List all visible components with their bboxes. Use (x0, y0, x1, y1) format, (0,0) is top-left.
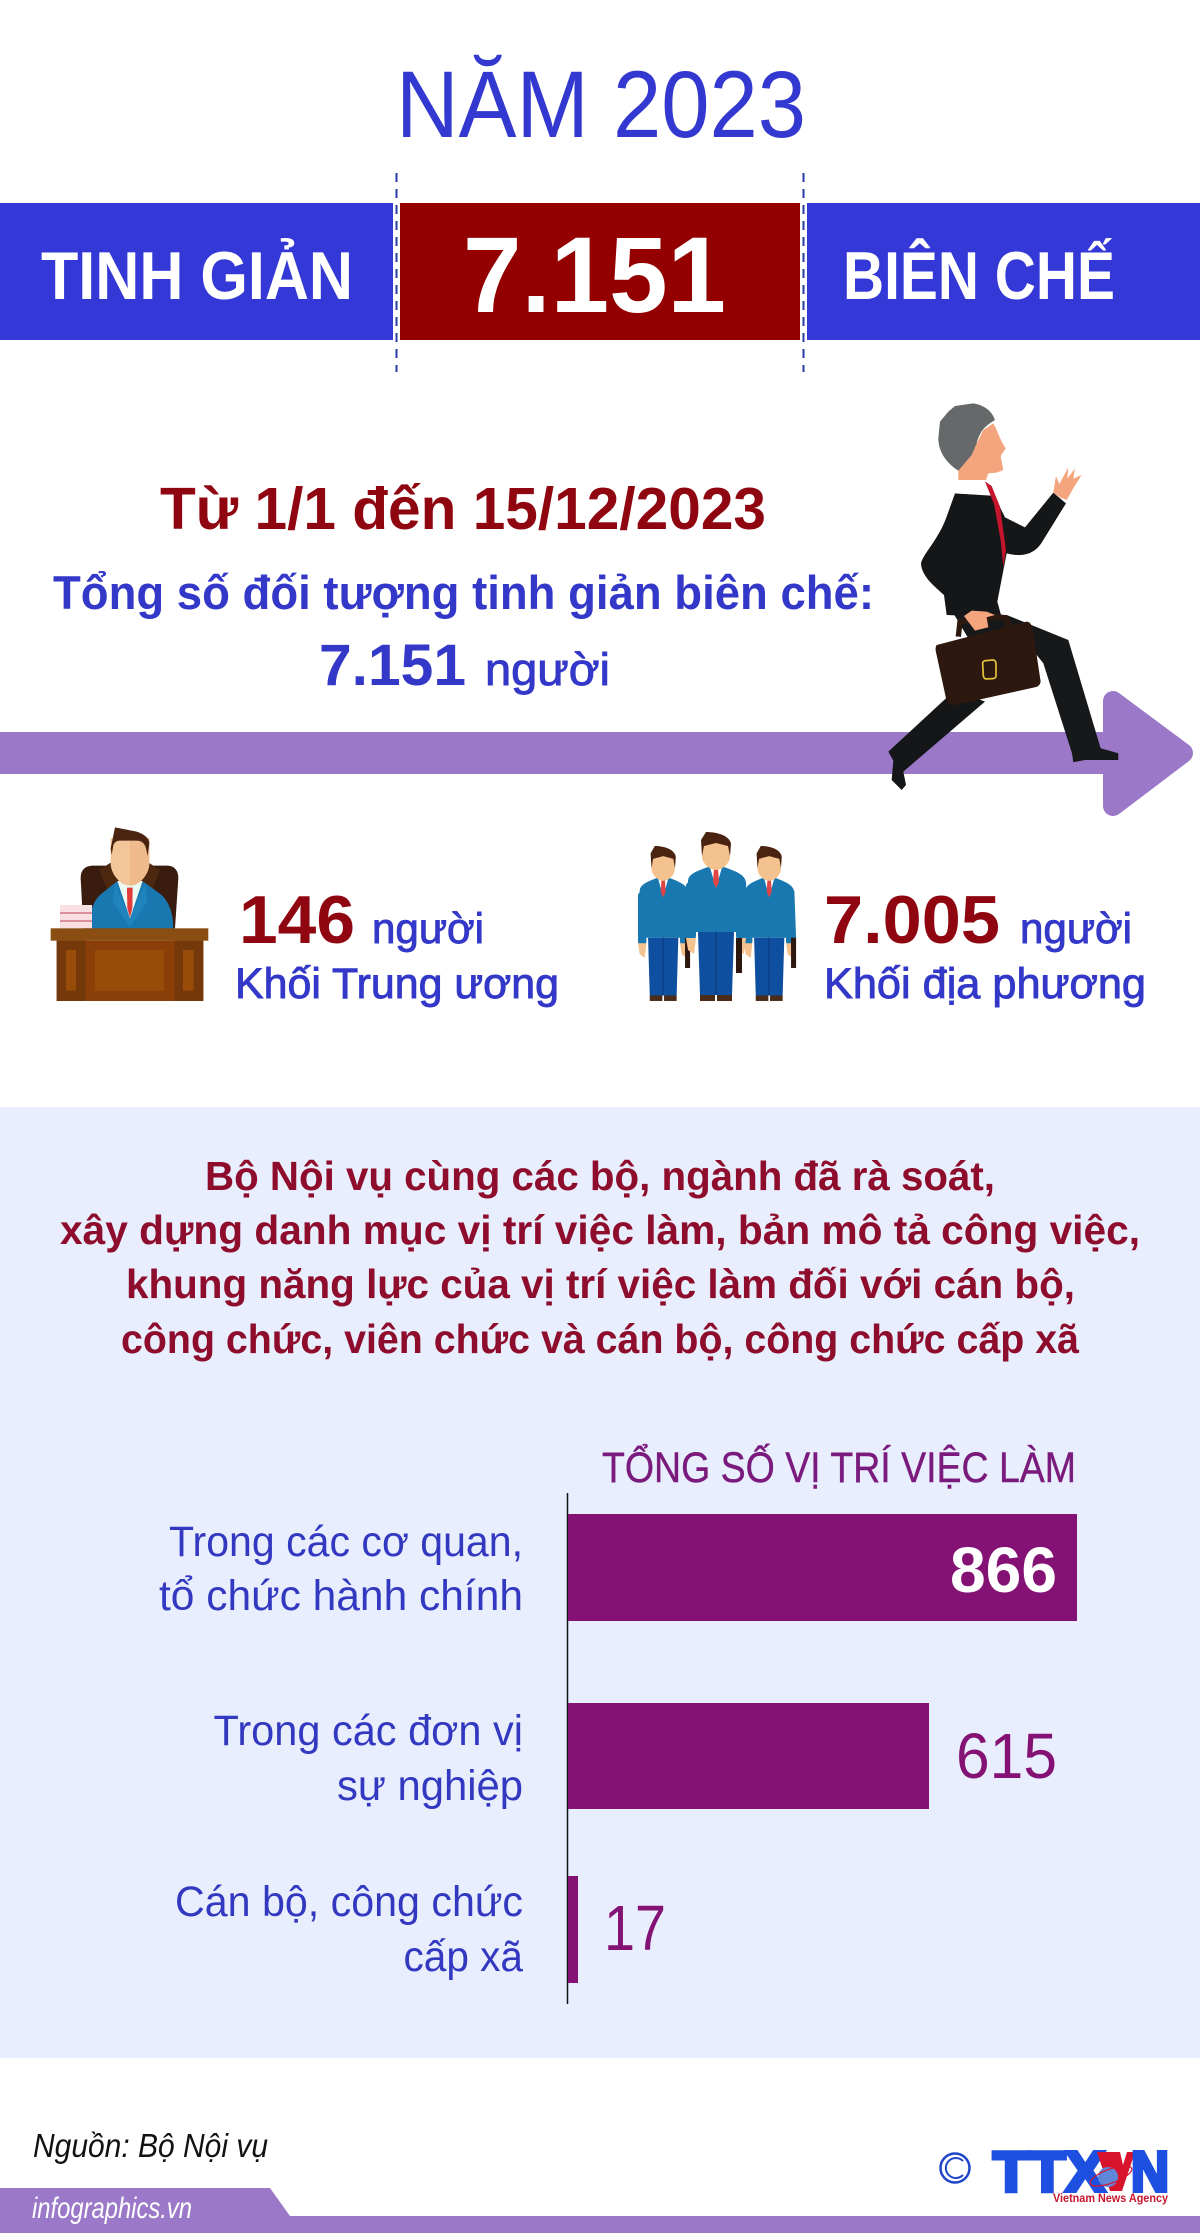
label: administrative agencies (159, 1518, 523, 1620)
chair wings (99, 863, 160, 892)
total number: 7.151 (319, 633, 466, 698)
stat: central bloc (235, 882, 559, 1008)
logo: TTXVN: TTX (993, 2140, 1105, 2204)
label: administrative agencies: tổ chức hành chính (159, 1572, 523, 1620)
banner: tinh giản 7.151 biên chế (0, 173, 1200, 372)
hair (111, 827, 149, 856)
chart heading: TỔNG SỐ VỊ TRÍ VIỆC LÀM (602, 1442, 1076, 1492)
face (958, 423, 1006, 480)
axis (566, 1493, 568, 2004)
stat: central bloc: 146 (239, 882, 355, 958)
total subject text: Tổng số đối tượng tinh giản biên chế: (53, 566, 874, 619)
panel: job positions (0, 1107, 1200, 2058)
left figure (638, 846, 690, 1001)
logo: TTXVN: Vietnam News Agency (1053, 2193, 1169, 2205)
total number: người (485, 644, 610, 695)
jacket (90, 882, 173, 928)
panel paragraph: công chức, viên chức và cán bộ, công chức cấp xã (121, 1316, 1079, 1362)
stat: local bloc: 7.005 (824, 882, 1000, 958)
desk panel (95, 950, 164, 991)
briefcase (936, 622, 1041, 705)
shirt (117, 881, 143, 918)
footer band (0, 2188, 1200, 2233)
desk body (57, 941, 203, 1001)
icon: three local officials (638, 832, 796, 1001)
lapels (113, 883, 147, 927)
face (111, 838, 149, 886)
desk inset right (183, 950, 194, 991)
bar chart: total job positions (159, 1442, 1077, 2004)
footer site: infographics.vn (32, 2192, 192, 2225)
label: commune officials: Cán bộ, công chức (175, 1878, 523, 1926)
books (60, 905, 92, 928)
panel paragraph: Bộ Nội vụ cùng các bộ, ngành đã rà soát, (205, 1153, 995, 1199)
label: public service units: sự nghiệp (337, 1762, 523, 1810)
value 17: 17 (604, 1892, 666, 1964)
date heading: Từ 1/1 đến 15/12/2023 (160, 476, 766, 542)
stat: local bloc: người (1020, 905, 1132, 953)
panel paragraph: khung năng lực của vị trí việc làm đối với cán bộ, (126, 1261, 1075, 1307)
hair (938, 403, 995, 471)
panel paragraph: xây dựng danh mục vị trí việc làm, bản mô tả công việc, (60, 1207, 1140, 1253)
collar (955, 479, 991, 496)
raised hand (1053, 467, 1082, 500)
bar: public service units (568, 1703, 929, 1809)
copyright symbol (940, 2154, 970, 2182)
face shade (130, 838, 149, 886)
bar: commune officials (568, 1876, 578, 1983)
desk inset left (66, 950, 76, 991)
briefcase handle (958, 617, 1010, 637)
gripping hand (964, 611, 995, 631)
tie (127, 888, 133, 917)
desk top (51, 928, 208, 941)
arrow (0, 701, 1183, 806)
logo: TTXVN: N (1131, 2140, 1169, 2204)
banner: tinh giản 7.151 biên chế: BIÊN CHẾ (843, 237, 1115, 314)
stat: central bloc: Khối Trung ương (235, 960, 559, 1008)
title: NĂM 2023 (396, 52, 806, 158)
stat: local bloc (824, 882, 1146, 1008)
desk side right (174, 941, 203, 1001)
chair (81, 866, 178, 928)
icon: walking businessman (888, 403, 1118, 790)
label: administrative agencies: Trong các cơ quan, (169, 1518, 523, 1566)
label: commune officials (175, 1878, 523, 1981)
banner: tinh giản 7.151 biên chế: TINH GIẢN (41, 237, 353, 314)
source: Nguồn: Bộ Nội vụ (33, 2127, 268, 2164)
icon: official at desk (51, 827, 208, 1001)
label: public service units (214, 1707, 523, 1810)
right figure (744, 846, 796, 1001)
desk side left (57, 941, 86, 1001)
tie (985, 481, 1006, 567)
jacket (921, 493, 1066, 617)
briefcase latch (983, 660, 996, 679)
logo: TTXVN (993, 2140, 1169, 2205)
value 866: 866 (950, 1534, 1057, 1606)
label: commune officials: cấp xã (404, 1933, 523, 1981)
near leg (953, 613, 1118, 762)
banner: tinh giản 7.151 biên chế: 7.151 (463, 214, 726, 335)
stat: central bloc: người (372, 905, 484, 953)
label: public service units: Trong các đơn vị (214, 1707, 523, 1755)
stat: local bloc: Khối địa phương (824, 960, 1146, 1008)
far leg (888, 690, 985, 790)
bar: administrative agencies (568, 1514, 1077, 1621)
value 615: 615 (956, 1720, 1057, 1792)
center figure (686, 832, 748, 1001)
total number (319, 633, 610, 698)
panel paragraph (60, 1153, 1140, 1362)
